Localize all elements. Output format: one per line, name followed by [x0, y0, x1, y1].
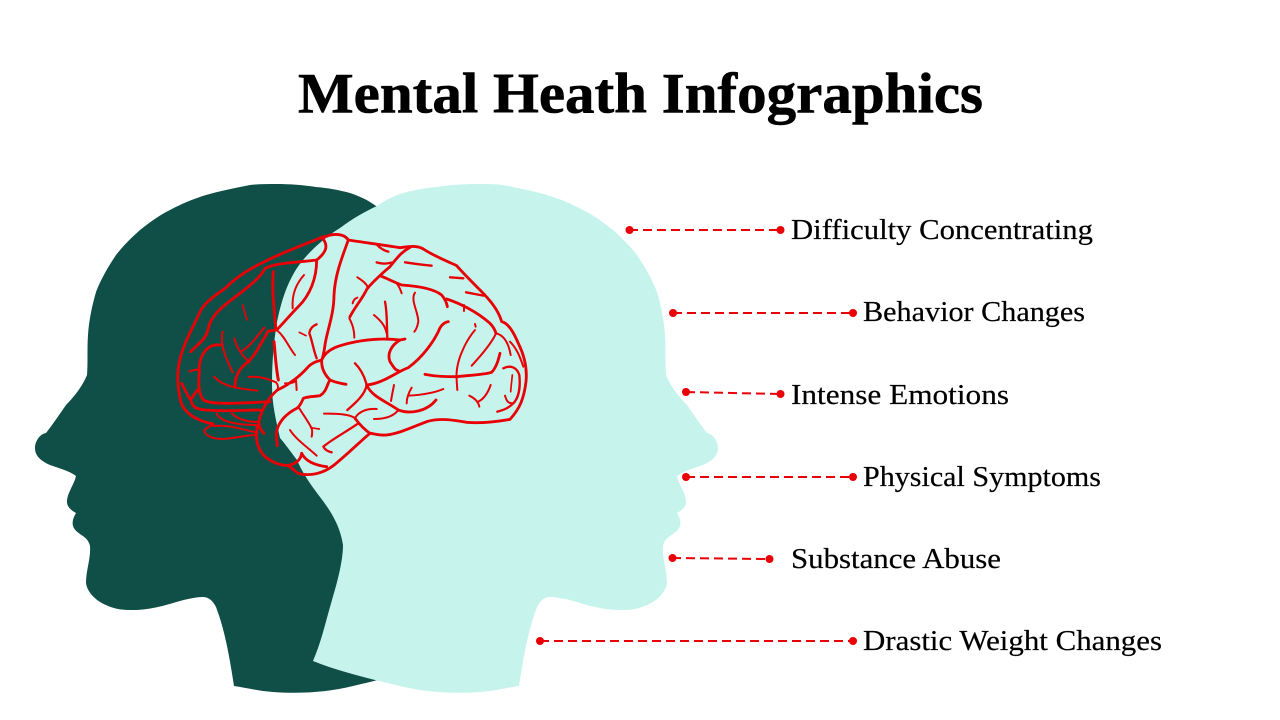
callout: Difficulty Concentrating	[626, 214, 1093, 246]
title: Mental Heath Infographics	[298, 62, 983, 126]
callout: Intense Emotions: Intense Emotions	[791, 379, 1009, 411]
callout: Intense Emotions	[682, 379, 1009, 411]
callout: Behavior Changes	[669, 296, 1085, 328]
dark head silhouette	[35, 184, 481, 693]
callout: Drastic Weight Changes	[536, 625, 1162, 657]
red brain illustration	[178, 234, 526, 475]
callout: Behavior Changes: Behavior Changes	[863, 296, 1085, 328]
callout: Physical Symptoms	[682, 461, 1101, 493]
light head silhouette	[272, 184, 718, 693]
callout: Difficulty Concentrating: Difficulty Concentrating	[791, 214, 1093, 246]
callout: Drastic Weight Changes: Drastic Weight Changes	[863, 625, 1162, 657]
callout: Substance Abuse: Substance Abuse	[791, 543, 1001, 575]
callout: Substance Abuse	[668, 543, 1001, 575]
callout: Physical Symptoms: Physical Symptoms	[863, 461, 1101, 493]
